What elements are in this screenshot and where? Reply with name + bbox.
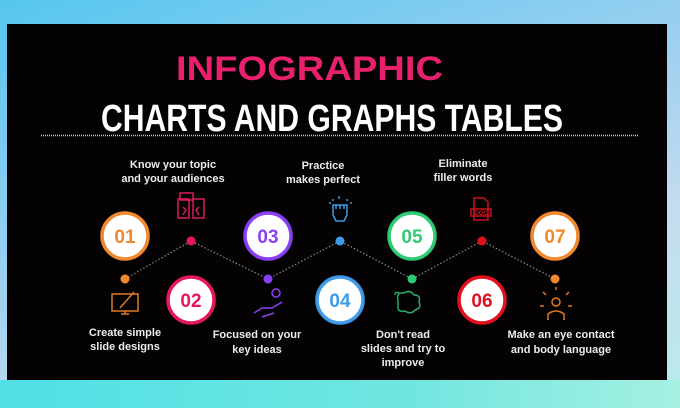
number circles: 03 bbox=[257, 227, 279, 248]
labels: filler words bbox=[434, 172, 492, 184]
labels: Know your topic bbox=[130, 159, 216, 171]
icon: faces talking bbox=[178, 193, 204, 218]
labels: Create simple bbox=[89, 327, 161, 339]
zigzag line bbox=[125, 241, 555, 279]
number circles: 06 bbox=[471, 291, 493, 312]
labels: Practice bbox=[302, 160, 344, 172]
icon: monitor brush bbox=[112, 292, 138, 314]
subtitle: CHARTS AND GRAPHS TABLES bbox=[101, 98, 563, 140]
number circles: 02 bbox=[180, 291, 202, 312]
icon: person bbox=[540, 287, 572, 320]
labels: Don't read bbox=[376, 329, 430, 341]
labels: improve bbox=[382, 357, 424, 369]
labels: and your audiences bbox=[121, 173, 225, 185]
labels: key ideas bbox=[232, 344, 282, 356]
dots bbox=[120, 236, 560, 284]
labels: makes perfect bbox=[286, 174, 360, 186]
icon: doc: DOC bbox=[474, 211, 488, 217]
labels: Eliminate bbox=[439, 158, 487, 170]
labels: Focused on your bbox=[213, 329, 302, 341]
number circles: 05 bbox=[401, 227, 423, 248]
title: INFOGRAPHIC bbox=[176, 50, 443, 88]
labels bbox=[89, 158, 615, 369]
labels: Make an eye contact bbox=[508, 329, 615, 341]
icon: doc bbox=[471, 198, 491, 220]
icon: hand gear bbox=[254, 289, 282, 317]
number circles: 01 bbox=[114, 227, 136, 248]
labels: slides and try to bbox=[361, 343, 445, 355]
icon: brain bbox=[395, 291, 420, 313]
number circles: 04 bbox=[329, 291, 351, 312]
labels: slide designs bbox=[90, 341, 160, 353]
number circles: 07 bbox=[544, 227, 566, 248]
icon: fist bbox=[329, 196, 352, 221]
number circles bbox=[102, 213, 578, 323]
labels: and body language bbox=[511, 344, 611, 356]
